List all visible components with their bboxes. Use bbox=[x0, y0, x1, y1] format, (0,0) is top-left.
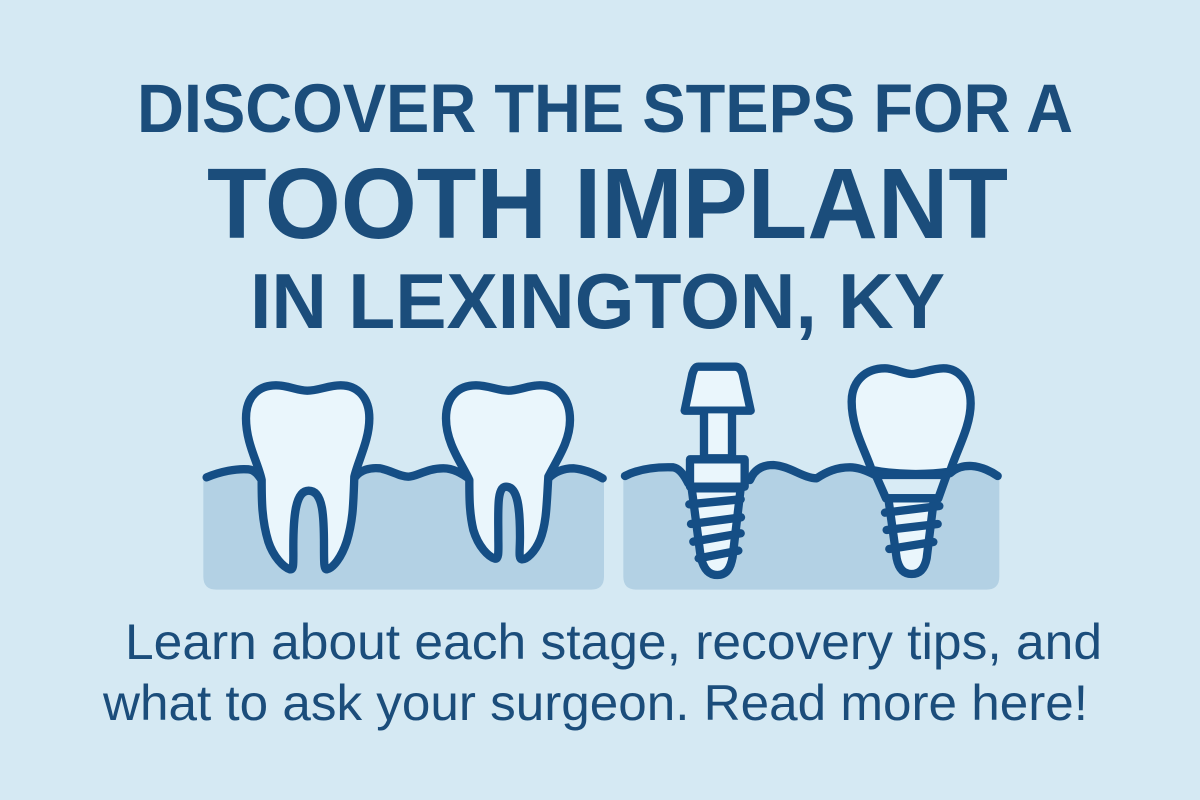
collar bbox=[690, 459, 745, 487]
abutment post bbox=[704, 413, 732, 458]
implant with abutment bbox=[685, 367, 751, 575]
implant with crown bbox=[852, 368, 971, 574]
title bbox=[137, 70, 1073, 345]
crown bbox=[852, 368, 971, 474]
threads bbox=[689, 499, 741, 558]
tagline bbox=[102, 614, 1102, 731]
screw body bbox=[888, 498, 934, 574]
tagline: Learn about each stage, recovery tips, and bbox=[125, 614, 1102, 670]
right tooth bbox=[446, 385, 570, 559]
tagline: what to ask your surgeon. Read more here! bbox=[102, 675, 1088, 731]
crown base bbox=[876, 475, 947, 498]
screw body bbox=[692, 488, 741, 575]
illustration: implants in gum bbox=[623, 367, 999, 590]
illustration: natural teeth in gum bbox=[203, 385, 604, 590]
gum block bbox=[203, 468, 604, 590]
threads bbox=[885, 506, 939, 549]
title: DISCOVER THE STEPS FOR A bbox=[137, 70, 1073, 147]
title: IN LEXINGTON, KY bbox=[250, 257, 945, 345]
title: TOOTH IMPLANT bbox=[207, 148, 1008, 260]
left tooth bbox=[246, 385, 369, 569]
gum line bbox=[207, 468, 603, 480]
abutment cap bbox=[685, 367, 751, 411]
gum block bbox=[623, 465, 999, 590]
gum line bbox=[625, 465, 998, 483]
